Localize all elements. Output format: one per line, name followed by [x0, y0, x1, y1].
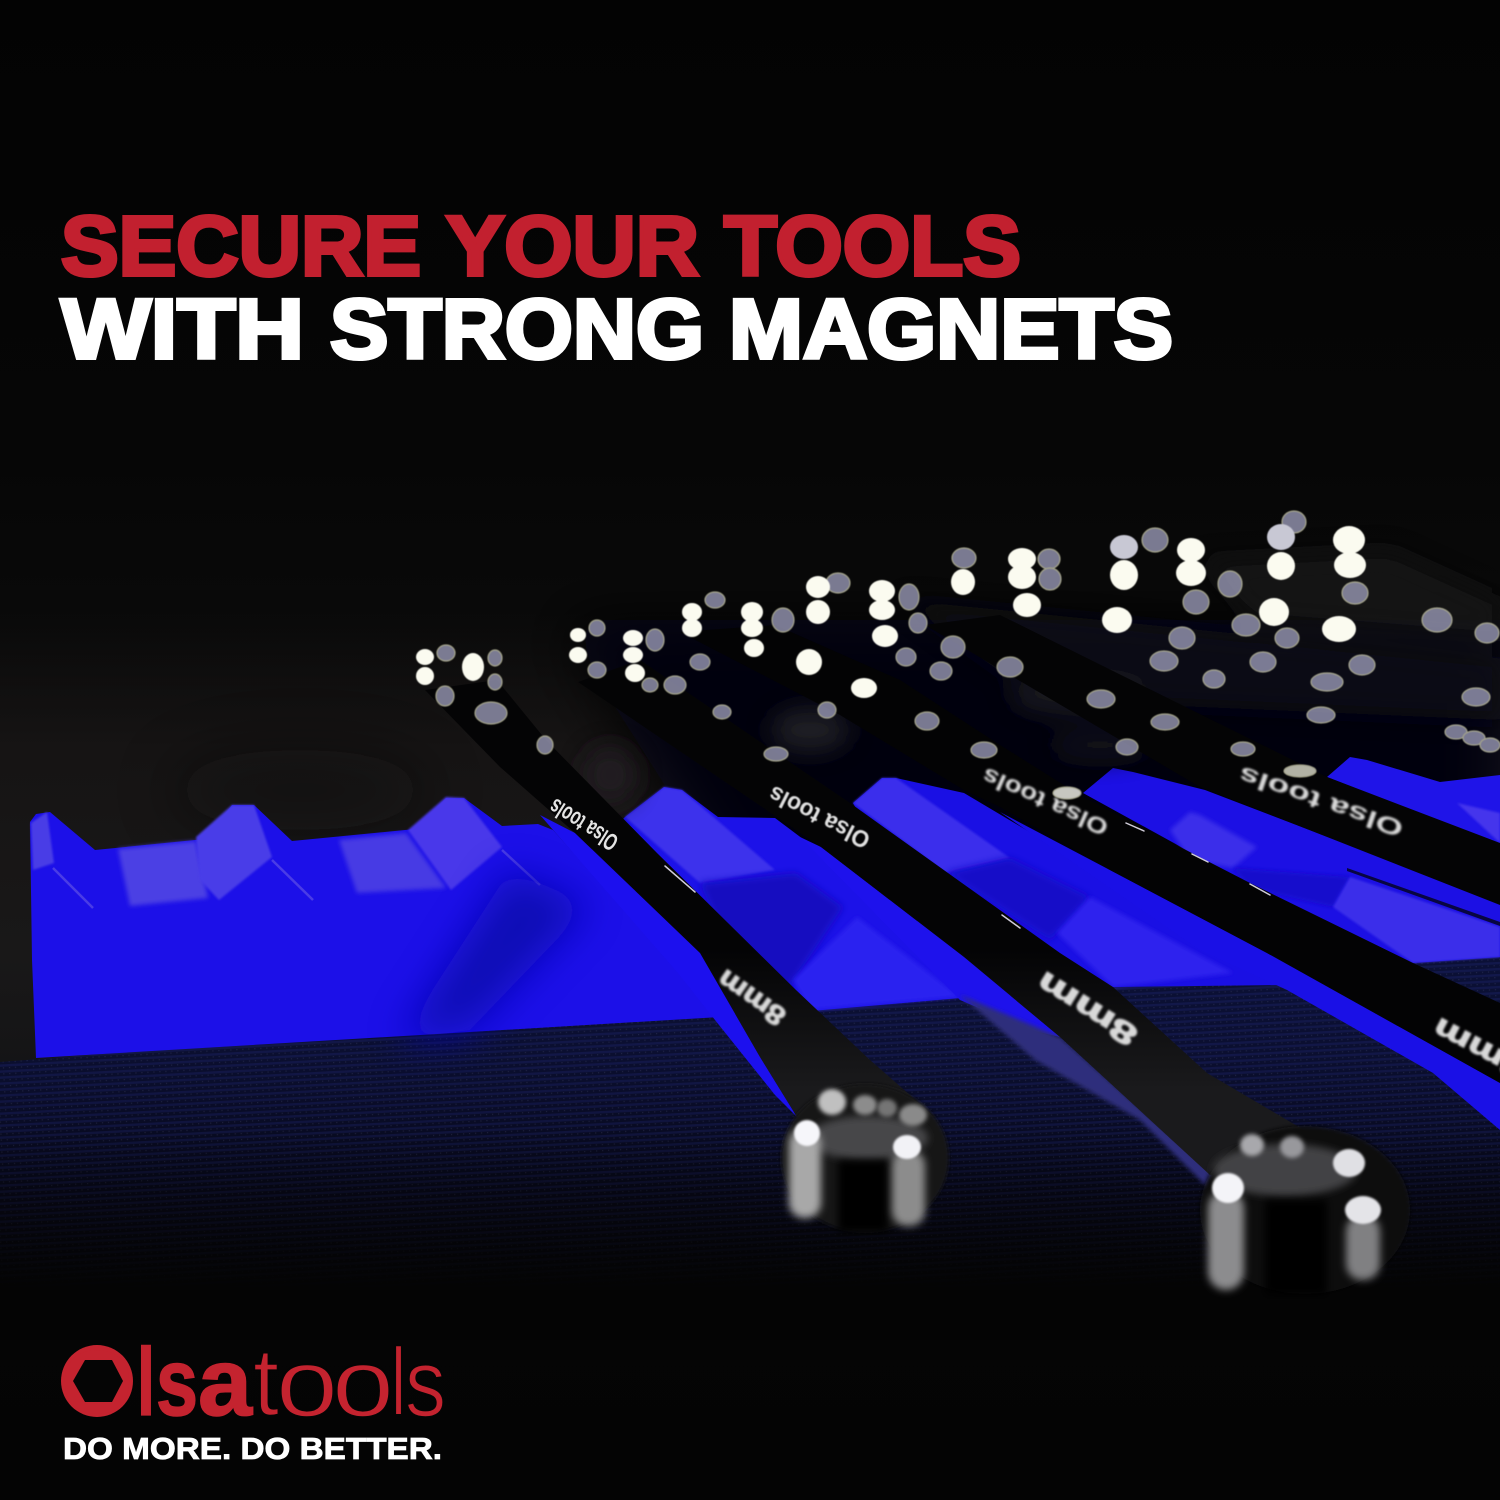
edge glints on wrench shafts [665, 823, 1270, 928]
heading line 2 [61, 282, 1173, 376]
heading [61, 199, 1173, 376]
magnetic holder: blue rail [30, 757, 1500, 1058]
etched size: 8mm [1030, 965, 1144, 1054]
etched brand: Olsa tools [764, 780, 875, 854]
logo tools [253, 1329, 446, 1437]
logo tools: o [276, 1330, 338, 1437]
holder section 5 far right [1327, 757, 1500, 845]
heading line 1 [61, 199, 1021, 293]
softer white highlights [1110, 524, 1295, 559]
tagline: DO MORE. DO BETTER. [63, 1431, 442, 1466]
near wrench head 2 [1200, 1126, 1410, 1295]
holder section 3 [853, 778, 1287, 1000]
wrench 4: shaft with logo etching [925, 615, 1500, 905]
reflection beside wrench 1 [540, 815, 797, 1117]
logo tools: o [332, 1330, 394, 1437]
heading line 2: STRONG [330, 282, 704, 376]
holder section 2 [560, 787, 964, 1015]
far wrench head bokeh: bright highlights [416, 526, 1366, 698]
reflection beside wrench 3 [1000, 812, 1500, 1130]
logo O with hex socket: O [61, 1333, 133, 1433]
etched brand: Olsa tools [1236, 760, 1407, 842]
logo lsa [137, 1329, 253, 1436]
logo: Olsatools [61, 1329, 446, 1437]
heading line 2: WITH [61, 282, 304, 376]
heading line 1: SECURE [61, 199, 421, 293]
wrench 1: shaft [425, 680, 935, 1117]
wrench 3: shaft [680, 625, 1500, 1087]
etched size: 8mm [711, 963, 791, 1032]
holder section 1 with three teeth [30, 797, 720, 1058]
etched brand: Olsa tools [544, 793, 623, 856]
holder section 4 [1083, 768, 1500, 963]
logo lsa: l [137, 1329, 155, 1436]
heading line 2: MAGNETS [729, 282, 1173, 376]
logo tools: l [391, 1329, 406, 1436]
far wrench head bokeh: dim highlights [436, 511, 1500, 799]
reflection beside wrench 2 [800, 837, 1060, 1037]
logo tools: s [405, 1330, 446, 1437]
far wrench shafts haze [582, 550, 1500, 805]
wrench 2: shaft [578, 660, 1384, 1177]
blue reflections alongside wrenches [540, 812, 1500, 1205]
logo tools: t [253, 1329, 279, 1436]
heading line 1: YOUR [446, 199, 699, 293]
heading line 1: TOOLS [724, 199, 1021, 293]
near wrench head 1 [781, 1084, 949, 1232]
logo lsa: a [198, 1329, 253, 1436]
fabric mat surface [0, 610, 1500, 1340]
logo lsa: s [156, 1329, 198, 1436]
etched brand: Olsa tools [978, 763, 1112, 841]
